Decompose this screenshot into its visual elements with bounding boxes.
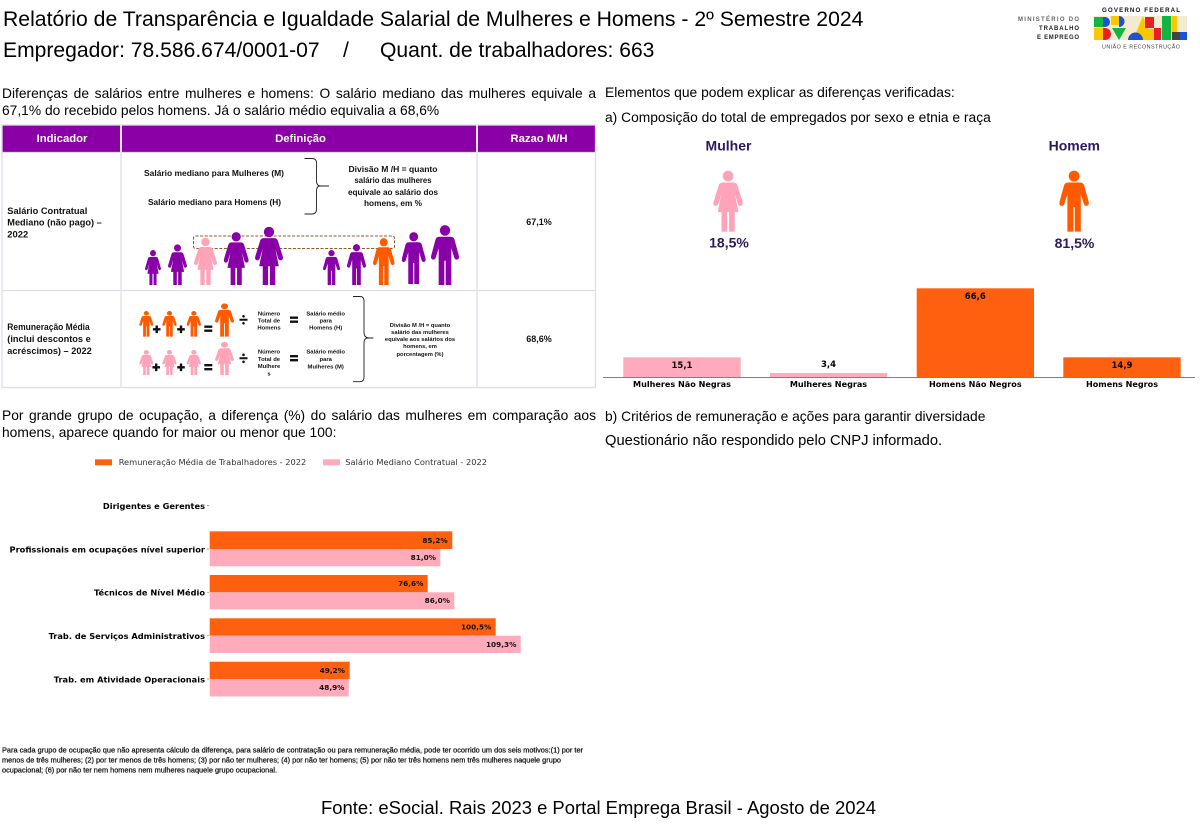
legend: Salário Mediano Contratual - 2022 bbox=[345, 457, 487, 467]
row 2: average remuneration: acréscimos) – 2022 bbox=[7, 346, 92, 356]
value labels: 109,3% bbox=[486, 640, 517, 649]
occupation paragraph: Por grande grupo de ocupação, a diferença (%) do salário das mulheres em comparação aos homens, aparece quando for maior ou menor que 100: bbox=[2, 408, 596, 440]
value labels: 48,9% bbox=[319, 683, 345, 692]
subheading a: workforce composition: a) Composição do total de empregados por sexo e etnia e raça bbox=[605, 109, 991, 125]
woman share bbox=[706, 138, 752, 250]
row 1: contractual median salary: salário das mulheres bbox=[354, 175, 432, 185]
icons: people in ascending order of salary bbox=[145, 225, 459, 285]
row 2: average remuneration: (inclui descontos e bbox=[7, 334, 91, 344]
row 1: contractual median salary: homens, em % bbox=[364, 198, 423, 208]
row 2: average remuneration: Total de bbox=[258, 318, 281, 324]
icons: sum of men's salaries bbox=[139, 303, 234, 337]
value labels: 100,5% bbox=[461, 622, 492, 632]
logos: ministry and federal government bbox=[1018, 7, 1187, 50]
column chart: workforce by sex and race: Mulheres Não Negras bbox=[633, 379, 731, 389]
column chart: workforce by sex and race: Mulheres Negras bbox=[790, 379, 867, 389]
row 1: contractual median salary: Salário Contratual bbox=[7, 206, 87, 216]
row 1: contractual median salary: equivale ao salário dos bbox=[348, 187, 438, 197]
column chart: workforce by sex and race: 66,6 bbox=[965, 292, 986, 302]
category labels: Técnicos de Nível Médio bbox=[94, 588, 205, 598]
table: indicators and definitions bbox=[1, 124, 596, 388]
row 2: average remuneration: Número bbox=[258, 312, 281, 318]
column chart: workforce by sex and race: 14,9 bbox=[1112, 361, 1133, 371]
table header: Razao M/H bbox=[510, 133, 568, 145]
employer information: Quant. de trabalhadores: 663 bbox=[380, 39, 654, 62]
man share: Homem bbox=[1049, 138, 1100, 154]
row 1: contractual median salary bbox=[7, 158, 552, 285]
row 2: average remuneration: s bbox=[267, 372, 271, 378]
value labels: 49,2% bbox=[320, 666, 346, 675]
row 2: average remuneration: Mulheres (M) bbox=[308, 364, 344, 370]
column chart: workforce by sex and race bbox=[603, 288, 1195, 389]
row 2: average remuneration: para bbox=[319, 357, 333, 363]
row 2: average remuneration: Remuneração Média bbox=[7, 322, 91, 332]
woman share: Mulher bbox=[706, 138, 752, 154]
row 2: average remuneration: Número bbox=[258, 350, 281, 356]
title: Relatório de Transparência e Igualdade Salarial de Mulheres e Homens - 2º Semestre 2024 bbox=[3, 8, 863, 31]
value labels: 81,0% bbox=[411, 553, 437, 562]
brace bbox=[304, 158, 329, 214]
footnote: menos de três mulheres; (2) por ter menos de três homens; (3) por não ter mulheres; (4) por não ter homens; (5) por não ter três homens nem três mulheres naquele grupo bbox=[2, 756, 561, 764]
row 1: contractual median salary: Salário mediano para Mulheres (M) bbox=[144, 168, 284, 178]
row 2: average remuneration: salário das mulheres bbox=[391, 330, 449, 336]
row 2: average remuneration: para bbox=[319, 318, 333, 324]
row 1: contractual median salary: 2022 bbox=[7, 229, 28, 239]
man share: 81,5% bbox=[1055, 235, 1095, 251]
category labels: Dirigentes e Gerentes bbox=[103, 501, 205, 511]
man share bbox=[1049, 138, 1100, 251]
row 2: average remuneration: porcentagem (%) bbox=[396, 352, 444, 358]
value labels: 86,0% bbox=[425, 596, 451, 605]
questionnaire note: Questionário não respondido pelo CNPJ informado. bbox=[605, 433, 942, 449]
legend: Remuneração Média de Trabalhadores - 2022 bbox=[119, 457, 306, 467]
column chart: workforce by sex and race: 15,1 bbox=[672, 361, 693, 371]
table header: Indicador bbox=[37, 133, 88, 145]
category labels bbox=[10, 501, 206, 684]
footnote: Para cada grupo de ocupação que não apresenta cálculo da diferença, para salário de contratação ou para remuneração média, pode ter ocorrido um dos seis motivos:(1) por ter bbox=[2, 746, 583, 754]
row 1: contractual median salary: Mediano (não pago) – bbox=[7, 217, 102, 227]
row 2: average remuneration: Salário médio bbox=[306, 312, 345, 318]
icons: sum of women's salaries bbox=[139, 342, 234, 375]
row 2: average remuneration: Total de bbox=[258, 357, 281, 363]
row 2: average remuneration: equivale aos salários dos bbox=[385, 337, 455, 343]
row 1: contractual median salary: Salário mediano para Homens (H) bbox=[148, 197, 281, 207]
column chart: workforce by sex and race: Homens Não Negros bbox=[929, 379, 1022, 389]
employer information bbox=[3, 39, 654, 62]
legend bbox=[95, 457, 487, 467]
category labels: Profissionais em ocupações nível superior bbox=[10, 544, 206, 554]
employer information: Empregador: 78.586.674/0001-07 bbox=[3, 39, 320, 62]
workforce share by sex bbox=[706, 138, 1100, 251]
logos: ministry and federal government: E EMPREGO bbox=[1037, 35, 1079, 41]
logos: ministry and federal government: GOVERNO FEDERAL bbox=[1102, 7, 1180, 14]
woman share: 18,5% bbox=[709, 234, 749, 250]
row 2: average remuneration bbox=[7, 296, 552, 382]
row 1: contractual median salary: Divisão M /H = quanto bbox=[348, 164, 438, 174]
row 2: average remuneration: Salário médio bbox=[306, 350, 345, 356]
row 1: contractual median salary: 67,1% bbox=[526, 217, 552, 227]
table header: Definição bbox=[275, 133, 326, 145]
category labels: Trab. de Serviços Administrativos bbox=[49, 631, 205, 641]
row 2: average remuneration: Divisão M /H = quanto bbox=[390, 323, 451, 329]
intro paragraph: salary differences: Diferenças de salários entre mulheres e homens: O salário mediano das mulheres equivale a 67,1% do recebido pelos homens. Já o salário médio equivalia a 68,6% bbox=[2, 86, 596, 118]
brace bbox=[353, 296, 374, 382]
row 2: average remuneration: Homens bbox=[257, 326, 281, 332]
bars bbox=[210, 531, 521, 696]
table header bbox=[2, 125, 595, 152]
value labels: 76,6% bbox=[398, 579, 424, 588]
row 2: average remuneration: Homens (H) bbox=[309, 326, 342, 332]
source line: Fonte: eSocial. Rais 2023 e Portal Emprega Brasil - Agosto de 2024 bbox=[321, 797, 876, 818]
bar chart: difference by occupational group bbox=[10, 457, 521, 696]
logos: ministry and federal government: UNIÃO E RECONSTRUÇÃO bbox=[1102, 44, 1180, 50]
value labels: 85,2% bbox=[422, 536, 448, 545]
column chart: workforce by sex and race: Homens Negros bbox=[1086, 379, 1158, 389]
footnote: ocupacional; (6) por não ter nem homens nem mulheres naquele grupo ocupacional. bbox=[2, 766, 277, 774]
row 2: average remuneration: Mulhere bbox=[258, 364, 281, 370]
employer information: / bbox=[343, 39, 349, 62]
logos: ministry and federal government: TRABALHO bbox=[1039, 26, 1079, 32]
column chart: workforce by sex and race: 3,4 bbox=[821, 360, 836, 370]
logos: ministry and federal government: MINISTÉRIO DO bbox=[1018, 15, 1079, 23]
row 2: average remuneration: 68,6% bbox=[526, 334, 552, 344]
right heading: explaining elements: Elementos que podem explicar as diferenças verificadas: bbox=[605, 84, 955, 100]
value labels bbox=[319, 536, 517, 692]
operators bbox=[152, 315, 298, 371]
category labels: Trab. em Atividade Operacionais bbox=[54, 674, 205, 684]
footnote bbox=[2, 746, 583, 774]
row 2: average remuneration: homens, em bbox=[403, 344, 437, 350]
subheading b: remuneration criteria: b) Critérios de remuneração e ações para garantir diversidade bbox=[605, 409, 985, 424]
dashed comparison box bbox=[194, 236, 394, 248]
